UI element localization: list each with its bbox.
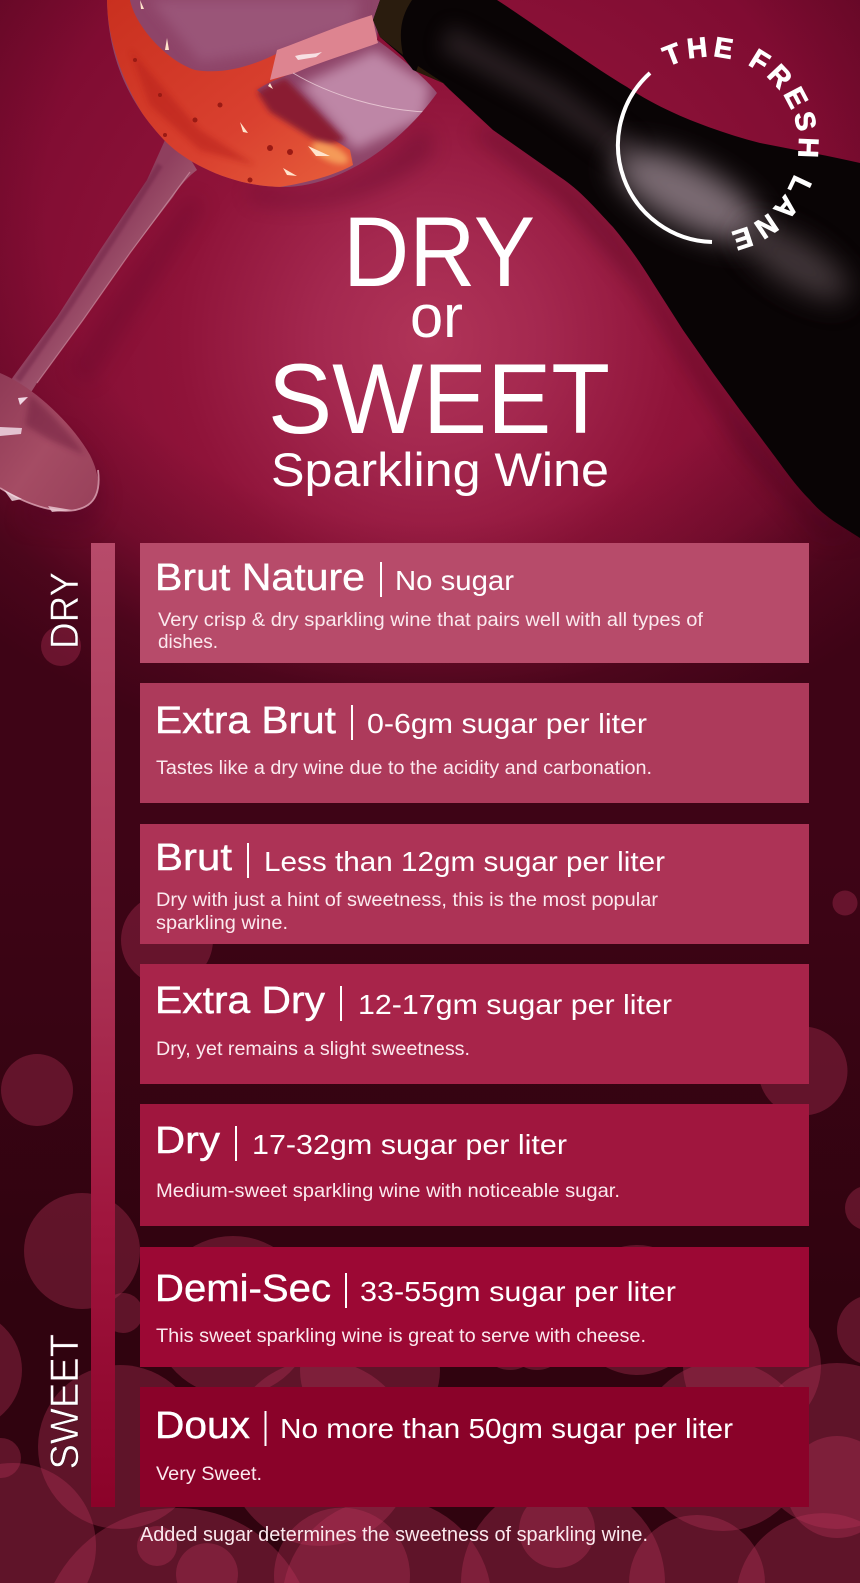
panel: Extra Dry: Dry, yet remains a slight sweetness. xyxy=(156,1039,470,1060)
panel: Doux: Doux xyxy=(155,1405,250,1447)
panel: Extra Dry xyxy=(140,964,809,1084)
panel: Extra Brut xyxy=(140,683,809,803)
panel: Extra Brut: Extra Brut xyxy=(155,700,336,742)
panel: Brut Nature: No sugar xyxy=(395,565,514,596)
panel: Doux: Very Sweet. xyxy=(156,1464,262,1485)
panel: Demi-Sec: This sweet sparkling wine is great to serve with cheese. xyxy=(156,1326,646,1347)
glass foot xyxy=(0,373,98,511)
panel: Doux xyxy=(140,1387,809,1507)
title: DRY xyxy=(343,196,535,307)
panel: Brut: sparkling wine. xyxy=(156,913,288,934)
panel: Demi-Sec: Demi-Sec xyxy=(155,1268,331,1310)
panel: Dry: Dry xyxy=(155,1120,220,1162)
panel: Extra Brut: 0-6gm sugar per liter xyxy=(367,708,647,739)
panel: Demi-Sec xyxy=(140,1247,809,1367)
glass stem xyxy=(0,140,197,420)
champagne bottle xyxy=(373,0,860,540)
decorative bubbles xyxy=(0,626,860,1583)
pouring stream xyxy=(270,15,378,80)
panel: Brut Nature: dishes. xyxy=(158,632,218,653)
wine glass pouring illustration xyxy=(0,0,445,530)
footer note: Added sugar determines the sweetness of sparkling wine. xyxy=(140,1524,648,1546)
panel: Brut xyxy=(140,824,809,944)
title xyxy=(268,196,610,496)
panel: Dry: Medium-sweet sparkling wine with noticeable sugar. xyxy=(156,1181,620,1202)
panel: Brut Nature: Very crisp & dry sparkling wine that pairs well with all types of xyxy=(158,610,704,631)
title: or xyxy=(410,283,463,350)
wine xyxy=(107,0,353,190)
panel: Doux: No more than 50gm sugar per liter xyxy=(280,1413,733,1444)
title: SWEET xyxy=(268,343,610,454)
panel: Demi-Sec: 33-55gm sugar per liter xyxy=(360,1276,676,1307)
logo: The Fresh Lane: THE FRESH LANE xyxy=(660,36,819,251)
sweetness scale bar xyxy=(91,543,115,1507)
title: Sparkling Wine xyxy=(271,443,609,496)
panel: Extra Dry: Extra Dry xyxy=(155,980,325,1022)
panel: Brut: Less than 12gm sugar per liter xyxy=(264,846,665,877)
panel: Dry: 17-32gm sugar per liter xyxy=(252,1129,567,1160)
panel: Brut: Dry with just a hint of sweetness, this is the most popular xyxy=(156,890,659,911)
panel: Brut: Brut xyxy=(155,837,232,879)
panel: Extra Brut: Tastes like a dry wine due to the acidity and carbonation. xyxy=(156,758,652,779)
scale label: dry: DRY xyxy=(43,572,87,649)
glass bowl xyxy=(100,0,445,195)
panel: Dry xyxy=(140,1104,809,1226)
panel: Brut Nature xyxy=(140,543,809,663)
panel: Extra Dry: 12-17gm sugar per liter xyxy=(358,989,672,1020)
scale label: sweet: SWEET xyxy=(43,1334,87,1470)
panel: Brut Nature: Brut Nature xyxy=(155,557,365,599)
